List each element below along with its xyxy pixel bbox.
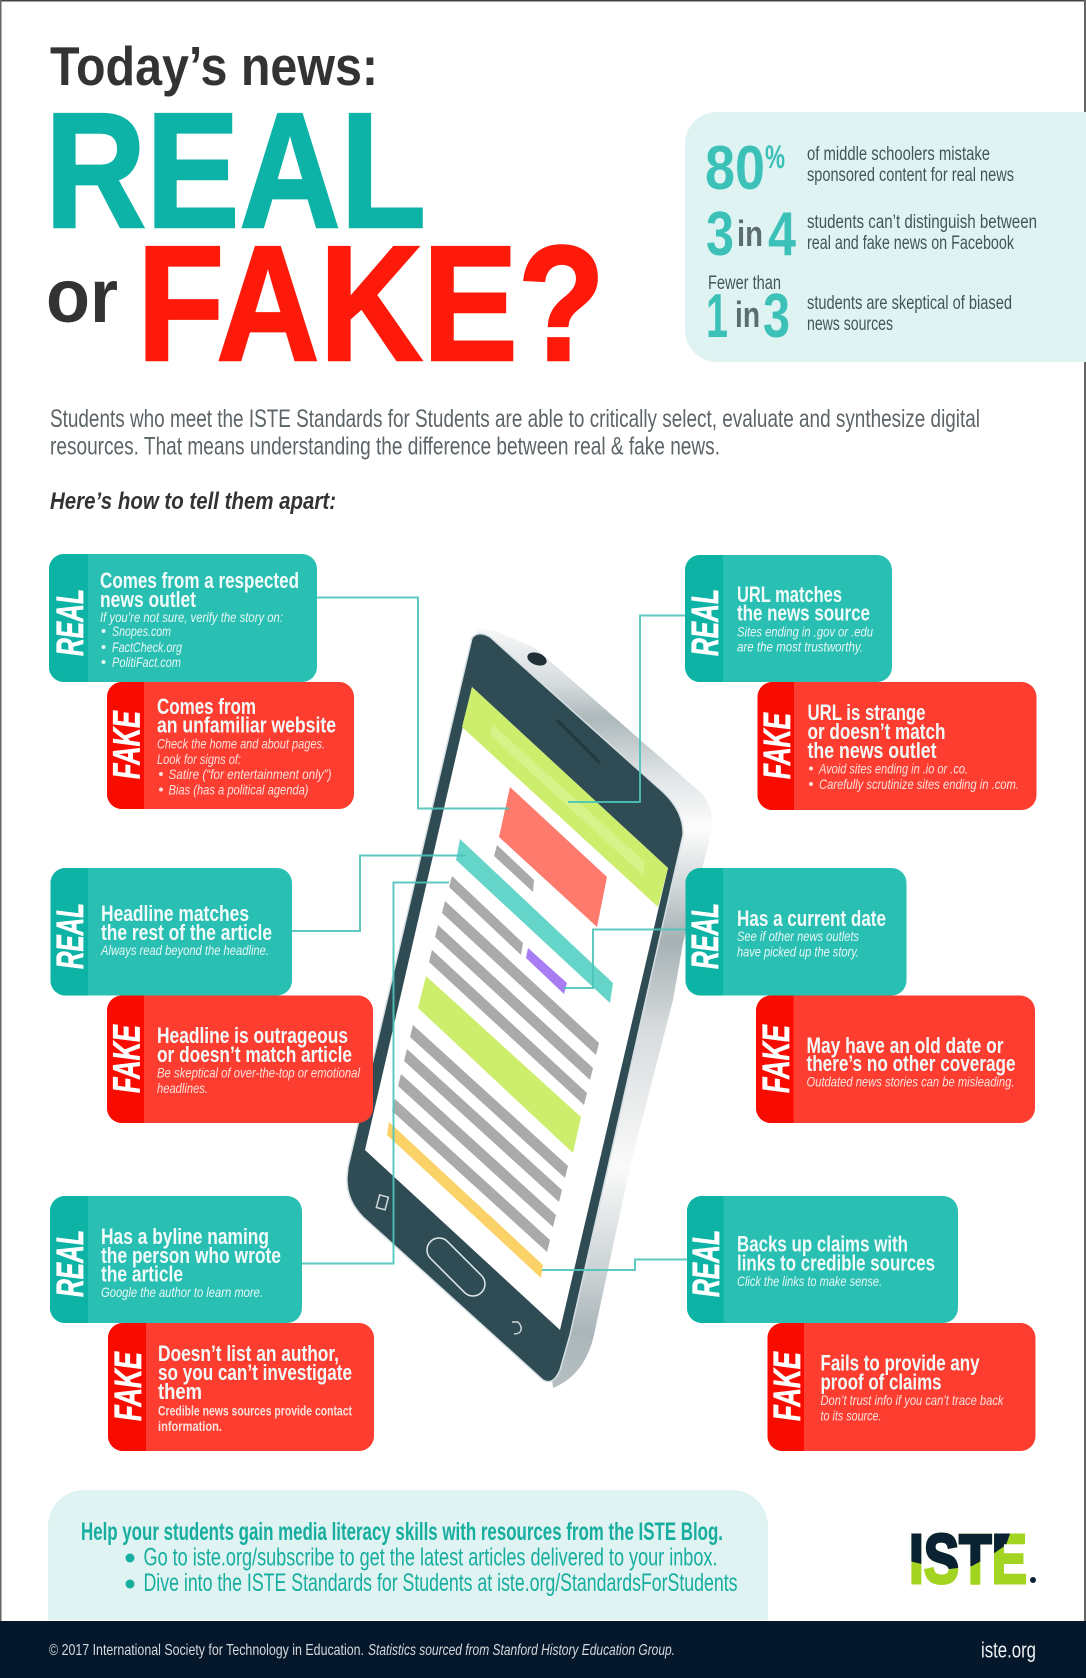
card: real - respected news outlet: Comes from a respected bbox=[100, 568, 299, 593]
footer bar: © 2017 International Society for Technology in Education. bbox=[49, 1642, 364, 1659]
phone camera bbox=[526, 650, 548, 668]
phone speaker bbox=[557, 720, 600, 763]
card: fake - no author bbox=[108, 1323, 374, 1451]
card: real - headline matches: Headline matches bbox=[101, 901, 249, 926]
card: fake - old date bbox=[756, 996, 1035, 1123]
card: real - byline: the person who wrote bbox=[101, 1243, 281, 1268]
title word: REAL: REAL bbox=[45, 79, 426, 262]
stat: 80%: % bbox=[765, 139, 785, 175]
card: real - URL matches: REAL bbox=[685, 589, 727, 656]
card: real - byline: Has a byline naming bbox=[101, 1224, 269, 1249]
stat: fewer than 1 in 3: 3 bbox=[763, 282, 790, 351]
card: real - credible links: Backs up claims with bbox=[737, 1232, 908, 1256]
card: fake - outrageous headline bbox=[106, 996, 373, 1123]
card: real - respected news outlet: news outlet bbox=[100, 587, 197, 612]
card: real - headline matches bbox=[50, 868, 292, 996]
stat: 3 in 4: 3 bbox=[706, 200, 734, 269]
stat: 3 in 4: 4 bbox=[768, 200, 796, 269]
card: fake - unfamiliar website: Satire (“for entertainment only”) bbox=[168, 766, 332, 782]
stat: 80%: 80 bbox=[705, 134, 765, 203]
card: fake - unfamiliar website: Bias (has a political agenda) bbox=[168, 782, 308, 798]
card: real - current date: REAL bbox=[685, 903, 727, 969]
stat: 3 in 4 bbox=[706, 200, 1037, 269]
card: real - headline matches: Always read beyond the headline. bbox=[100, 942, 269, 958]
stat: fewer than 1 in 3: news sources bbox=[807, 314, 893, 335]
card: fake - no proof: to its source. bbox=[820, 1408, 882, 1424]
intro paragraph bbox=[50, 405, 980, 460]
card: fake - unfamiliar website: an unfamiliar website bbox=[157, 712, 336, 738]
card: fake - strange URL: Carefully scrutinize sites ending in .com. bbox=[819, 776, 1019, 792]
card: fake - no proof: FAKE bbox=[767, 1351, 809, 1421]
card: fake - outrageous headline: Headline is outrageous bbox=[157, 1023, 348, 1048]
screen: purple link bbox=[526, 948, 567, 994]
footer bar: iste.org bbox=[981, 1638, 1036, 1662]
card: fake - no proof: Fails to provide any bbox=[820, 1350, 980, 1376]
card: fake - no proof bbox=[767, 1323, 1036, 1451]
card: real - credible links: REAL bbox=[686, 1230, 728, 1297]
card: fake - strange URL: Avoid sites ending in .io or .co. bbox=[818, 760, 968, 776]
footer bar bbox=[0, 1621, 1086, 1678]
card: fake - no author: so you can’t investigate bbox=[158, 1360, 352, 1385]
card: real - respected news outlet: Snopes.com bbox=[112, 623, 171, 639]
panel: call to action bbox=[48, 1490, 768, 1620]
card: fake - outrageous headline: FAKE bbox=[106, 1024, 148, 1093]
logo: ISTE bbox=[911, 1532, 1036, 1585]
phone screen bbox=[365, 687, 668, 1330]
card: real - headline matches: REAL bbox=[50, 903, 92, 969]
stat: 80%: of middle schoolers mistake bbox=[807, 144, 990, 165]
card: real - current date: See if other news outlets bbox=[737, 928, 859, 944]
card: real - URL matches: are the most trustworthy. bbox=[737, 638, 863, 654]
stat: 80% bbox=[705, 134, 1014, 203]
card: real - URL matches: URL matches bbox=[737, 582, 842, 607]
panel: statistics bbox=[685, 112, 1086, 362]
stat: 80%: sponsored content for real news bbox=[807, 165, 1014, 186]
card: fake - unfamiliar website: Look for signs of: bbox=[157, 751, 241, 767]
screen: top bar bbox=[462, 687, 668, 907]
card: real - credible links: links to credible sources bbox=[737, 1250, 935, 1276]
subheading: Here’s how to tell them apart: bbox=[50, 488, 336, 515]
card: fake - unfamiliar website: FAKE bbox=[106, 710, 148, 779]
card: fake - old date: May have an old date or bbox=[806, 1033, 1004, 1058]
card: real - current date bbox=[685, 868, 906, 996]
stat: fewer than 1 in 3 bbox=[706, 273, 1012, 351]
phone back icon bbox=[512, 1322, 521, 1334]
connector lines bbox=[292, 598, 687, 1270]
card: real - byline: REAL bbox=[50, 1230, 92, 1297]
title word: FAKE?: FAKE? bbox=[137, 212, 605, 395]
card: real - respected news outlet: REAL bbox=[50, 589, 92, 656]
card: real - current date: Has a current date bbox=[737, 906, 886, 931]
stat: fewer than 1 in 3: Fewer than bbox=[708, 273, 781, 294]
card: real - credible links: Click the links to make sense. bbox=[737, 1273, 882, 1289]
card: fake - unfamiliar website bbox=[106, 682, 354, 809]
card: fake - unfamiliar website: Check the home and about pages. bbox=[157, 736, 325, 752]
card: real - URL matches: Sites ending in .gov or .edu bbox=[737, 624, 873, 640]
card: fake - no proof: proof of claims bbox=[820, 1370, 942, 1394]
card: real - credible links bbox=[686, 1196, 958, 1323]
card: fake - no author: Credible news sources provide contact bbox=[158, 1402, 352, 1418]
card: real - respected news outlet: If you’re not sure, verify the story on: bbox=[100, 609, 283, 625]
phone body bbox=[347, 634, 683, 1382]
screen: yellow bar bbox=[387, 1122, 543, 1278]
screen: grey text lines bbox=[392, 845, 599, 1252]
stat: fewer than 1 in 3: in bbox=[735, 294, 760, 335]
screen: teal headline bar bbox=[456, 839, 613, 1003]
illustration: smartphone bbox=[347, 629, 712, 1388]
stat: fewer than 1 in 3: students are skeptical of biased bbox=[807, 293, 1012, 314]
card: real - current date: have picked up the story. bbox=[737, 944, 859, 960]
title word: or: or bbox=[46, 254, 118, 339]
stat: 3 in 4: real and fake news on Facebook bbox=[807, 233, 1014, 254]
stat: 3 in 4: in bbox=[737, 213, 763, 254]
card: fake - strange URL: the news outlet bbox=[808, 738, 937, 763]
card: fake - outrageous headline: headlines. bbox=[157, 1080, 208, 1096]
card: real - respected news outlet bbox=[49, 554, 317, 682]
card: fake - strange URL: URL is strange bbox=[808, 700, 926, 725]
card: fake - strange URL: or doesn’t match bbox=[808, 719, 946, 744]
card: real - headline matches: the rest of the article bbox=[101, 920, 272, 945]
card: fake - no author: information. bbox=[158, 1418, 222, 1434]
card: fake - old date: FAKE bbox=[756, 1024, 798, 1093]
card: fake - no proof: Don’t trust info if you can’t trace back bbox=[820, 1392, 1004, 1408]
logo: ISTE: ISTE bbox=[909, 1520, 1027, 1598]
card: fake - outrageous headline: Be skeptical of over-the-top or emotional bbox=[157, 1064, 361, 1080]
phone home button bbox=[422, 1233, 490, 1301]
panel: call to action: Help your students gain media literacy skills with resources from the ISTE Blog. bbox=[81, 1518, 723, 1546]
card: fake - no author: them bbox=[158, 1379, 202, 1404]
phone menu icon bbox=[376, 1195, 388, 1210]
intro paragraph: resources. That means understanding the difference between real & fake news. bbox=[50, 432, 720, 460]
card: real - byline: Google the author to learn more. bbox=[101, 1284, 263, 1300]
card: fake - outrageous headline: or doesn’t match article bbox=[157, 1042, 352, 1067]
card: fake - old date: there’s no other coverage bbox=[806, 1051, 1016, 1076]
card: real - respected news outlet: PolitiFact.com bbox=[112, 654, 181, 670]
card: fake - unfamiliar website: Comes from bbox=[157, 694, 256, 719]
card: real - respected news outlet: FactCheck.org bbox=[112, 639, 182, 655]
card: real - byline bbox=[50, 1196, 302, 1323]
card: fake - strange URL bbox=[757, 682, 1036, 810]
header: Today's news: Today’s news: bbox=[50, 35, 378, 97]
panel: call to action: Dive into the ISTE Standards for Students at iste.org/StandardsForStudents bbox=[144, 1569, 738, 1597]
card: fake - no author: Doesn’t list an author, bbox=[158, 1341, 339, 1366]
logo: ISTE: ISTE bbox=[909, 1520, 1027, 1598]
card: fake - old date: Outdated news stories can be misleading. bbox=[806, 1074, 1014, 1090]
screen: green block bbox=[418, 976, 581, 1153]
footer bar: Statistics sourced from Stanford History Education Group. bbox=[368, 1642, 675, 1659]
phone silver side bbox=[476, 629, 712, 1388]
panel: call to action: Go to iste.org/subscribe to get the latest articles delivered to your inbox. bbox=[144, 1544, 718, 1572]
screen: red image block bbox=[499, 787, 607, 927]
card: real - URL matches: the news source bbox=[737, 600, 870, 626]
card: real - byline: the article bbox=[101, 1262, 183, 1286]
stat: fewer than 1 in 3: 1 bbox=[706, 282, 728, 351]
card: fake - no author: FAKE bbox=[108, 1351, 150, 1421]
card: real - URL matches bbox=[685, 555, 892, 682]
card: fake - strange URL: FAKE bbox=[757, 712, 799, 779]
